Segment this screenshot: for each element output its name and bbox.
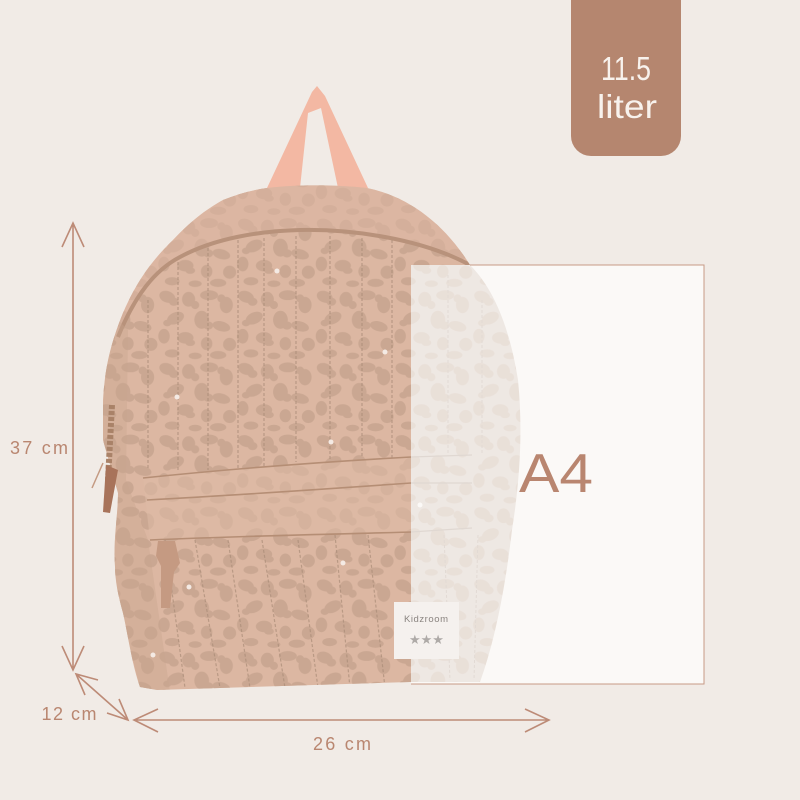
front pocket flap [143, 457, 411, 540]
side zipper cord [92, 463, 103, 488]
capacity text: liter [597, 88, 657, 125]
backpack top panel [120, 186, 465, 323]
backpack seen through sheet [411, 265, 531, 684]
brand label: Kidzroom [404, 614, 448, 625]
front zipper pull [156, 541, 180, 608]
brand label [394, 602, 459, 659]
capacity badge [571, 0, 681, 156]
height label: 37 cm [10, 438, 68, 458]
side zipper chain [108, 405, 112, 480]
backpack handle [267, 86, 368, 188]
main zipper [118, 230, 470, 337]
panel: A4 sheet [411, 265, 704, 684]
arrow: depth [76, 674, 128, 720]
side zipper pull [103, 465, 118, 513]
depth label: 12 cm [42, 704, 96, 724]
side shadow [103, 320, 170, 692]
quilting lines [148, 236, 392, 688]
polka dots [150, 268, 388, 658]
A4 label: A4 [519, 442, 593, 504]
sheet paper [411, 265, 704, 684]
capacity text: 11.5 [601, 50, 651, 87]
icon: backpack [91, 86, 470, 690]
width label: 26 cm [313, 734, 371, 754]
arrow: width [134, 709, 549, 732]
arrow: height [62, 223, 84, 670]
brand label: ★★★ [409, 632, 444, 647]
front pocket seams [143, 457, 411, 540]
capacity text [597, 50, 657, 125]
backpack body [103, 185, 470, 690]
sheet outline [411, 265, 704, 684]
